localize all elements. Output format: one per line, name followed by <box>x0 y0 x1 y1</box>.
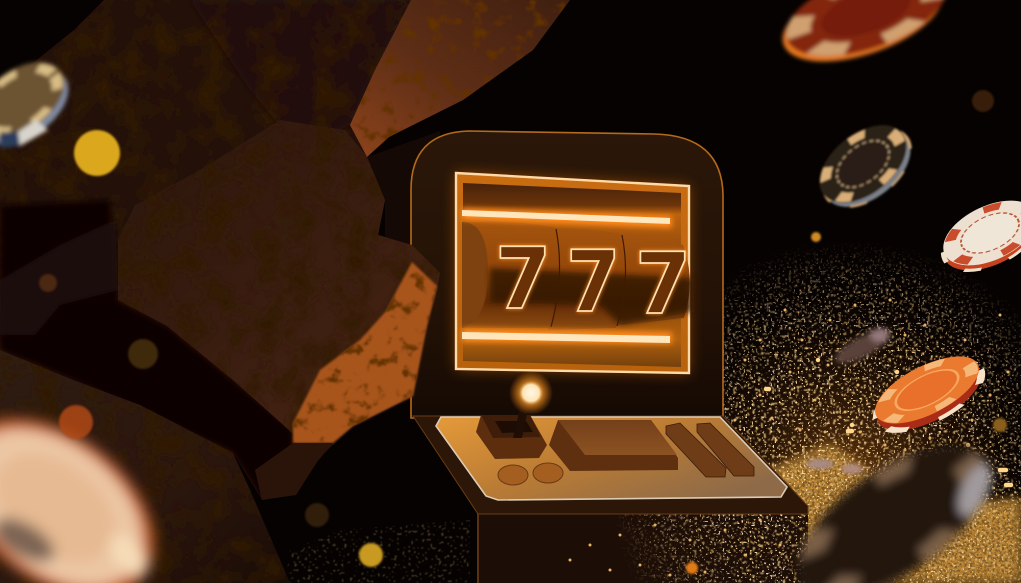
rocks <box>0 0 570 583</box>
control deck <box>413 416 808 514</box>
joystick light <box>509 371 553 415</box>
machine base <box>477 512 808 583</box>
rock mass base <box>0 0 570 500</box>
rock: top centre face <box>190 0 411 150</box>
neon bar bottom <box>462 328 672 344</box>
slot machine <box>367 131 808 514</box>
rock: dark gap band <box>0 200 293 500</box>
rock: top right lit face <box>350 0 570 157</box>
reels <box>462 222 692 330</box>
keypad <box>666 423 754 477</box>
chip: top left blurred <box>0 47 82 159</box>
glitter particles <box>285 240 1021 583</box>
bokeh lights <box>39 90 1007 574</box>
rock: lower shard <box>255 443 333 500</box>
chip: top right <box>772 0 957 79</box>
number sevens: 7 <box>635 234 691 334</box>
warm glow behind glitter <box>640 280 1021 583</box>
neon bar top <box>462 208 672 228</box>
chip: large bottom right dark <box>771 415 1015 583</box>
rock: large centre face <box>118 120 440 440</box>
chip: blurred far <box>831 324 893 370</box>
rock: orange lit patch <box>293 262 437 443</box>
joystick <box>513 404 529 438</box>
blurred sand chips <box>806 459 863 474</box>
screen frame <box>456 173 689 373</box>
golden sand <box>740 444 1021 583</box>
centre pad <box>549 420 678 471</box>
rock: bottom left boulder <box>0 350 290 583</box>
number sevens <box>495 229 691 334</box>
larger glitter dots <box>570 300 1008 575</box>
machine cabinet <box>411 131 723 418</box>
screen glow <box>456 173 689 373</box>
chip: lower orange <box>865 343 991 444</box>
round buttons <box>498 463 563 485</box>
number sevens: 7 <box>566 233 620 332</box>
chip: large bottom left <box>0 382 188 583</box>
chip: right <box>933 187 1021 284</box>
joystick base <box>476 415 547 459</box>
rock: left blue-grey shadow face <box>0 220 118 335</box>
control panel <box>436 371 787 500</box>
screen interior <box>463 183 681 367</box>
number sevens: 7 <box>495 229 551 329</box>
chip: upper middle dark <box>805 110 925 222</box>
side panel behind cabinet <box>367 131 440 300</box>
